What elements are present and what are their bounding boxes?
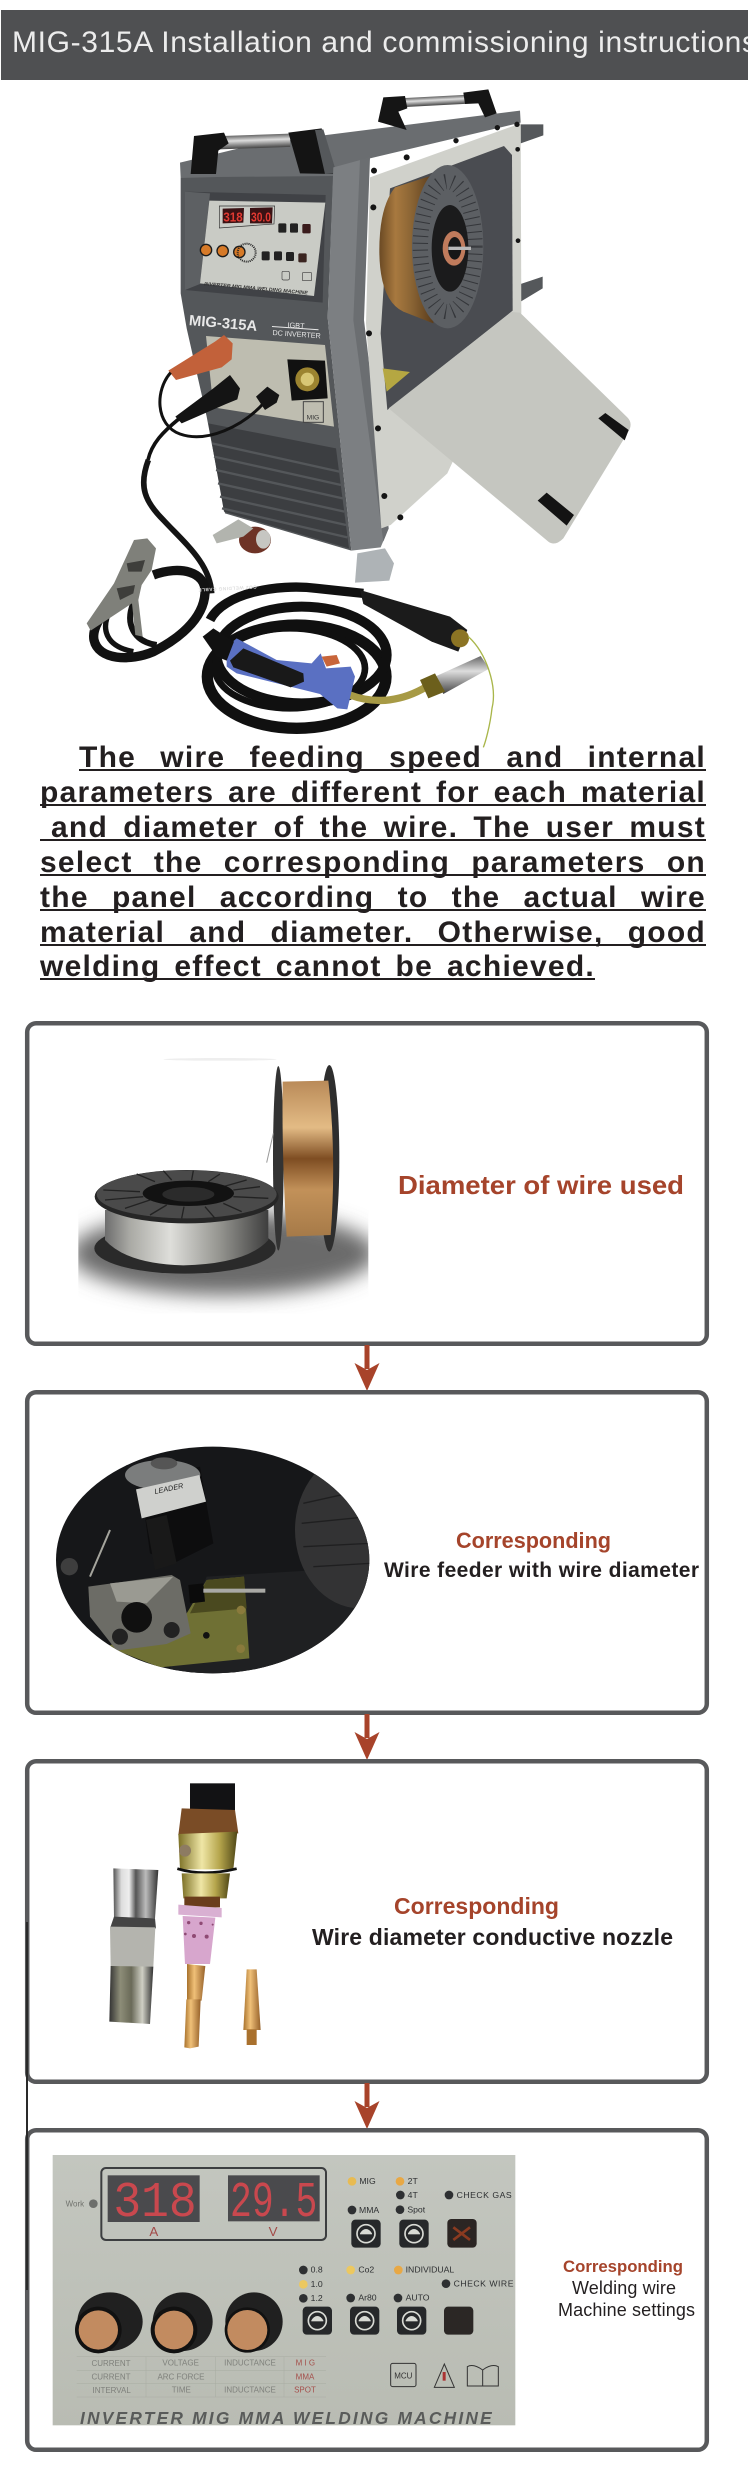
- indicators: MIG: [359, 2176, 376, 2186]
- photo: wire feeder: LEADER: [154, 1481, 185, 1496]
- function table: ARC FORCE: [157, 2372, 205, 2381]
- label: Wire feeder with wire diameter: [384, 1559, 699, 1582]
- readout frame: [66, 2168, 326, 2240]
- indicators: AUTO: [406, 2293, 430, 2303]
- control panel: 318: [223, 209, 243, 224]
- body text paragraph: welding effect cannot be achieved.: [40, 950, 595, 983]
- control recess: [185, 192, 326, 303]
- torch cable coils: [207, 587, 387, 728]
- indicators: Co2: [358, 2265, 374, 2275]
- indicators: [299, 2176, 514, 2303]
- indicators: 2T: [408, 2176, 418, 2186]
- photo: MIG-315A welding machine with cables and torch: [87, 89, 631, 747]
- photo: wire feeder: [56, 1446, 370, 1674]
- knobs: [75, 2292, 283, 2353]
- panel 2: wire feeder: [27, 1392, 707, 1713]
- label: Diameter of wire used: [398, 1170, 684, 1200]
- machine title: INVERTER MIG MMA WELDING MACHINE: [80, 2408, 492, 2428]
- control panel: 30.0: [251, 209, 271, 224]
- body text paragraph: select the corresponding parameters on: [40, 846, 706, 879]
- torch neck: [350, 687, 427, 700]
- control panel: INVERTER MIG MMA WELDING MACHINE: [204, 281, 309, 296]
- body text paragraph: [40, 741, 706, 983]
- label: Corresponding: [456, 1528, 611, 1553]
- frame screws: [366, 122, 520, 520]
- torch nozzle: [420, 656, 489, 698]
- door: [389, 312, 631, 544]
- body text paragraph: material and diameter. Otherwise, good: [40, 916, 706, 949]
- front handle: [191, 128, 337, 174]
- photo: two wire spools: [70, 1058, 377, 1295]
- function table: CURRENT: [91, 2359, 131, 2368]
- model label: MIG-315A: [188, 313, 258, 335]
- function table: SPOT: [294, 2386, 316, 2395]
- panel icons: MCU: [394, 2372, 413, 2381]
- earth cable coil: [94, 570, 205, 658]
- indicators: CHECK GAS: [457, 2190, 512, 2200]
- model label: DC INVERTER: [272, 328, 321, 340]
- rear handle: [378, 89, 497, 130]
- brass bracket: [383, 368, 410, 392]
- title banner: MIG-315A Installation and commissioning instructions: [12, 26, 748, 59]
- panel 1: diameter of wire: [27, 1023, 707, 1344]
- function table: INTERVAL: [93, 2386, 131, 2395]
- buttons: [303, 2219, 477, 2335]
- rear arms: [521, 124, 543, 302]
- indicators: 4T: [408, 2190, 418, 2200]
- label: Corresponding: [563, 2257, 683, 2276]
- readout frame: V: [269, 2224, 278, 2239]
- green-yellow wire: [468, 637, 493, 747]
- photo: torch head and nozzle parts: [109, 1783, 261, 2048]
- body text paragraph: parameters are different for each material: [40, 776, 706, 809]
- readout frame: Work: [66, 2200, 84, 2209]
- red connector: [168, 335, 233, 380]
- right foot: [355, 548, 394, 583]
- indicators: MMA: [359, 2205, 379, 2215]
- body text paragraph: the panel according to the actual wire: [40, 881, 706, 914]
- indicators: Ar80: [358, 2293, 377, 2303]
- socket: MIG: [307, 414, 319, 421]
- front cables: [148, 373, 265, 460]
- readout frame: 29.5: [230, 2175, 317, 2232]
- function table: INDUCTANCE: [224, 2386, 276, 2395]
- model label: IGBT: [287, 320, 305, 331]
- readout frame: A: [149, 2224, 158, 2239]
- torch handle: [203, 628, 355, 709]
- body text paragraph: The wire feeding speed and internal: [79, 741, 706, 774]
- control panel: [200, 201, 325, 296]
- arrow 3: [354, 2083, 380, 2129]
- label: [312, 1893, 673, 1950]
- panel icons: [391, 2363, 498, 2387]
- model label: [188, 313, 321, 340]
- function table: INDUCTANCE: [224, 2359, 276, 2368]
- label: Corresponding: [394, 1893, 559, 1919]
- arrow 2: [354, 1714, 380, 1760]
- vents: [208, 423, 349, 548]
- label: Welding wire: [572, 2278, 676, 2298]
- panel 3: conductive nozzle: [27, 1761, 707, 2082]
- left caster: [213, 519, 271, 553]
- side pillar: [328, 157, 389, 551]
- black connectors: [175, 375, 279, 423]
- front face: [181, 176, 351, 551]
- photo: control panel: [53, 2155, 515, 2428]
- interior: [381, 146, 513, 410]
- indicators: 1.2: [311, 2293, 323, 2303]
- indicators: CHECK WIRE: [454, 2278, 514, 2288]
- function table: [77, 2357, 326, 2397]
- wire coil: [379, 175, 433, 323]
- rear connector: [360, 590, 469, 652]
- function table: M I G: [296, 2359, 315, 2368]
- function table: VOLTAGE: [162, 2359, 199, 2368]
- function table: CURRENT: [91, 2373, 131, 2382]
- indicators: INDIVIDUAL: [406, 2264, 454, 2274]
- function table: TIME: [172, 2386, 191, 2395]
- panel 4: machine settings: [27, 2130, 707, 2450]
- indicators: 0.8: [311, 2265, 323, 2275]
- label: [558, 2257, 695, 2320]
- cable print: CO2 WELDING CABLE: [198, 584, 257, 592]
- indicators: 1.0: [311, 2279, 323, 2289]
- label: [384, 1528, 699, 1582]
- socket: [287, 359, 328, 422]
- title banner: [1, 10, 748, 80]
- body text paragraph: and diameter of the wire. The user must: [51, 811, 706, 844]
- thin left rule: [26, 1922, 28, 2290]
- spool flange: [412, 165, 483, 328]
- label: Machine settings: [558, 2300, 695, 2320]
- label: Wire diameter conductive nozzle: [312, 1924, 673, 1950]
- readout frame: 318: [113, 2175, 197, 2232]
- connector panel: [206, 336, 334, 427]
- white side frame: [366, 123, 521, 528]
- function table: MMA: [296, 2372, 315, 2381]
- work cable: [144, 460, 212, 593]
- top plate: [180, 111, 521, 177]
- arrow 1: [354, 1345, 380, 1391]
- earth clamp: [87, 538, 156, 637]
- indicators: Spot: [407, 2204, 426, 2214]
